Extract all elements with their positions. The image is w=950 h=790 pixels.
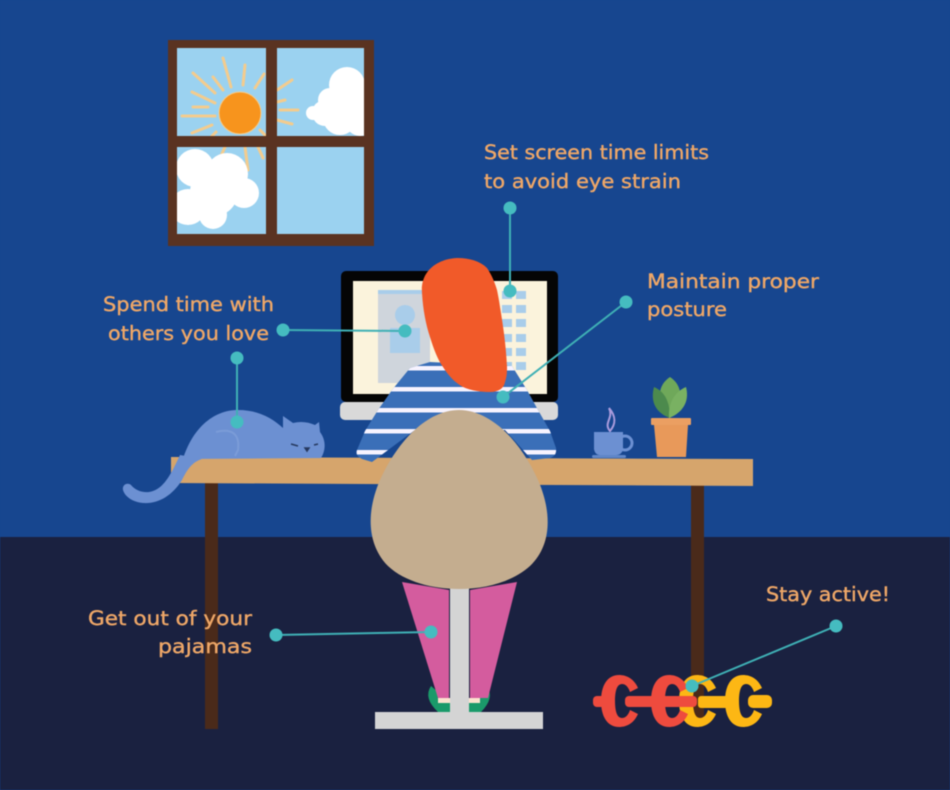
dumbbell weights: [593, 675, 772, 727]
callout: pajamas: Get out of your: [88, 607, 253, 630]
chair pole and base: [375, 586, 543, 729]
callout: screen time: to avoid eye strain: [484, 170, 681, 193]
shoes: [428, 686, 490, 712]
floor background: [0, 537, 950, 790]
icon: sun: [182, 58, 298, 170]
callout: pajamas: [88, 607, 438, 658]
plant leaves: [653, 377, 687, 418]
computer monitor: [340, 271, 558, 420]
callout: screen time: Set screen time limits: [484, 141, 709, 164]
person at desk: [350, 258, 560, 729]
wall background: [0, 0, 950, 538]
yellow weight: [679, 675, 772, 727]
desk: [171, 457, 753, 729]
screen: photo panel: [378, 290, 430, 383]
icon: cloud upper right: [306, 66, 365, 136]
hair: [422, 258, 507, 392]
coffee cup: [592, 408, 632, 458]
left desk leg: [205, 480, 218, 729]
legs: [402, 582, 517, 703]
icon: cloud lower left: [170, 149, 259, 229]
screen: tile grid: [502, 291, 526, 370]
callout: posture: Maintain proper: [647, 270, 820, 293]
callout: posture: posture: [647, 298, 727, 321]
potted plant: [651, 377, 691, 457]
callout: time with others: [103, 293, 412, 428]
striped sweater: [356, 361, 557, 462]
red weight: [593, 675, 697, 727]
callout: stay active: Stay active!: [766, 583, 890, 606]
right desk leg: [691, 484, 704, 722]
window: [168, 40, 378, 246]
callout: stay active: [686, 583, 890, 692]
callout: time with others: others you love: [108, 322, 269, 345]
callout: screen time: [484, 141, 709, 298]
callout: time with others: Spend time with: [103, 293, 274, 316]
chair back: [371, 410, 548, 589]
callout: pajamas: pajamas: [158, 635, 252, 658]
cat: [123, 410, 325, 503]
callout: posture: [496, 270, 820, 404]
